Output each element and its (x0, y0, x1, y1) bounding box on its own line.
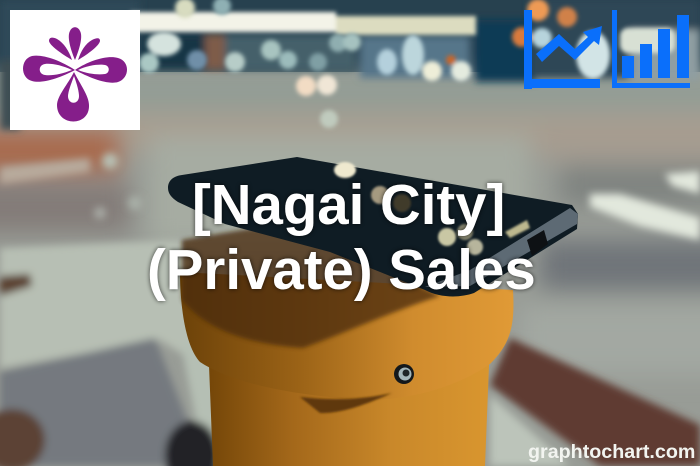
bokeh lights (139, 0, 675, 128)
shadow on rim (182, 222, 440, 348)
pale pavement and shadow shapes (0, 240, 700, 466)
icon: bar chart (612, 10, 690, 88)
top bright sign (130, 12, 476, 35)
screw on post (394, 364, 414, 384)
title: [Nagai City] (192, 173, 505, 236)
title shadow (147, 173, 536, 301)
icon: line chart with arrow (524, 10, 602, 89)
crescent shadow under rim (300, 393, 392, 413)
title (147, 173, 536, 301)
logo: white panel with purple flower (10, 10, 140, 130)
title: (Private) Sales (147, 238, 536, 301)
title shadow: (Private) Sales (147, 238, 536, 301)
watermark: site name: graphtochart.com (528, 441, 695, 463)
icon: flower emblem (23, 27, 127, 122)
yellow post (180, 222, 513, 466)
road markings (0, 153, 700, 240)
phone lying on post (168, 157, 578, 296)
dark storefront band (0, 0, 700, 130)
title shadow: [Nagai City] (192, 173, 505, 236)
